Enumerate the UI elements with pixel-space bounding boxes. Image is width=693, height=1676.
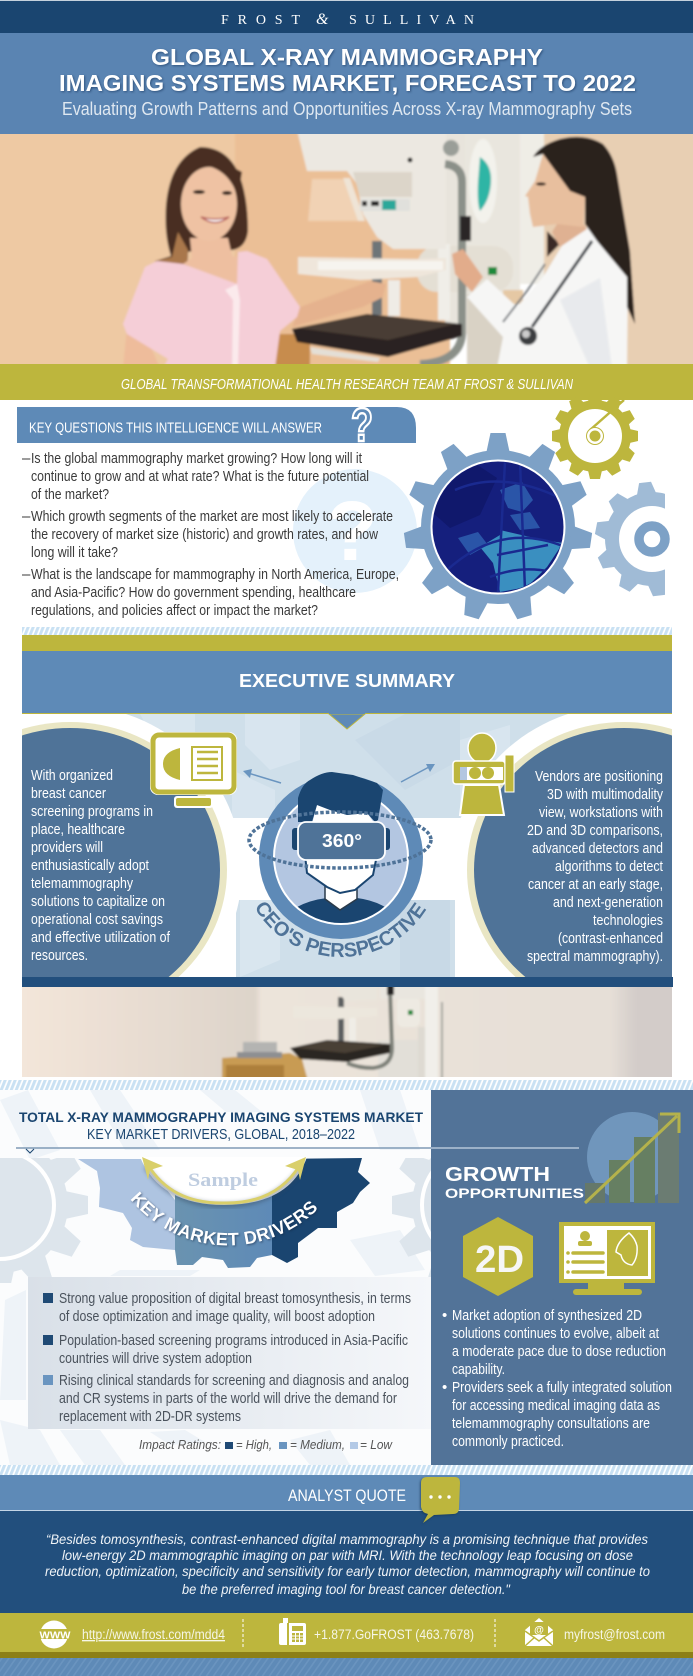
heading: OPPORTUNITIES bbox=[445, 1185, 584, 1201]
left summary text: screening programs in bbox=[31, 803, 153, 820]
footer stripe band bbox=[0, 1658, 693, 1676]
hex background bbox=[110, 714, 590, 977]
legend: impact ratings: Impact Ratings: bbox=[139, 1437, 221, 1452]
right summary text: spectral mammography). bbox=[527, 948, 663, 965]
key questions list: continue to grow and at what rate? What is the future potential bbox=[31, 468, 369, 485]
text: • bbox=[442, 1379, 447, 1396]
heading: key market drivers: KEY MARKET DRIVERS, GLOBAL, 2018–2022 bbox=[87, 1126, 355, 1143]
left summary text: solutions to capitalize on bbox=[31, 893, 165, 910]
hair bbox=[298, 772, 383, 822]
panel: executive summary bbox=[22, 714, 672, 977]
heading bbox=[445, 1164, 584, 1201]
key questions list: the recovery of market size (historic) and growth rates, and how bbox=[31, 526, 378, 543]
icon: www bbox=[38, 1620, 72, 1648]
gear: key market drivers bbox=[78, 1157, 370, 1268]
left summary text: operational cost savings bbox=[31, 911, 163, 928]
photo: mammography room bbox=[18, 983, 676, 1081]
arrow: to left icon bbox=[243, 769, 281, 783]
subtitle: Evaluating Growth Patterns and Opportunities Across X-ray Mammography Sets bbox=[62, 99, 632, 119]
text: Market adoption of synthesized 2D bbox=[452, 1307, 642, 1324]
globe land and grid bbox=[432, 460, 565, 592]
ear pieces bbox=[292, 828, 300, 850]
panel: driver list: of dose optimization and image quality, will boost adoption bbox=[59, 1308, 375, 1325]
quote text: “Besides tomosynthesis, contrast-enhanced digital mammography is a promising technique that provides bbox=[46, 1531, 648, 1547]
legend: impact ratings: = Medium, bbox=[290, 1437, 345, 1452]
stripes bbox=[0, 1465, 693, 1475]
brand name: FROST bbox=[221, 13, 300, 28]
top brand bar bbox=[0, 0, 693, 33]
key questions list: – bbox=[22, 566, 31, 583]
right summary text: cancer at an early stage, bbox=[528, 876, 663, 893]
bullet: high bbox=[43, 1293, 53, 1303]
panel: driver list: Rising clinical standards for screening and diagnosis and analog bbox=[59, 1372, 409, 1389]
title banner bbox=[0, 33, 693, 134]
right summary text: Vendors are positioning bbox=[535, 768, 663, 785]
heading: key market drivers: TOTAL X-RAY MAMMOGRAPHY IMAGING SYSTEMS MARKET bbox=[19, 1109, 423, 1125]
key questions header: KEY QUESTIONS THIS INTELLIGENCE WILL ANSWER bbox=[29, 420, 322, 436]
shoulders bbox=[298, 898, 384, 923]
right summary text: view, workstations with bbox=[539, 804, 663, 821]
left summary text: place, healthcare bbox=[31, 821, 125, 838]
text: telemammography consultations are bbox=[452, 1415, 650, 1432]
panel: driver list: and CR systems in parts of the world will drive the demand for bbox=[59, 1390, 397, 1407]
left summary text: providers will bbox=[31, 839, 103, 856]
icon: large pale question mark circle: ? bbox=[326, 484, 378, 578]
heading: key market drivers bbox=[19, 1109, 423, 1143]
footer contact bar bbox=[0, 1613, 693, 1658]
hero photo: patient and technician at mammography machine bbox=[0, 130, 693, 370]
olive credit band: GLOBAL TRANSFORMATIONAL HEALTH RESEARCH TEAM AT FROST & SULLIVAN bbox=[121, 377, 573, 393]
icon: 2D hexagon: 2D bbox=[475, 1239, 524, 1281]
background pattern bbox=[0, 1090, 425, 1465]
right summary text: (contrast-enhanced bbox=[558, 930, 663, 947]
right summary text: 2D and 3D comparisons, bbox=[527, 822, 663, 839]
panel: driver list: replacement with 2D-DR systems bbox=[59, 1408, 241, 1425]
icon: mail bbox=[525, 1618, 553, 1646]
panel: growth opportunities bbox=[431, 1090, 693, 1465]
legend: impact ratings: = Low bbox=[360, 1437, 393, 1452]
neck bbox=[325, 885, 357, 910]
icon: mail: @ bbox=[534, 1625, 544, 1636]
key questions list: Which growth segments of the market are most likely to accelerate bbox=[31, 508, 393, 525]
left summary text: resources. bbox=[31, 947, 88, 964]
icon: olive gear bbox=[552, 393, 638, 479]
executive summary banner bbox=[22, 651, 672, 714]
quote text: reduction, optimization, specificity and sensitivity for early tumor detection, mammography will continue to bbox=[45, 1563, 650, 1579]
right summary text: advanced detectors and bbox=[532, 840, 663, 857]
goggles bbox=[298, 822, 385, 860]
technician bbox=[467, 227, 628, 368]
right summary text: 3D with multimodality bbox=[547, 786, 663, 803]
left summary text: breast cancer bbox=[31, 785, 106, 802]
icon: telephone bbox=[279, 1618, 306, 1645]
icon: growth chart bbox=[585, 1112, 679, 1203]
icon: www: WWW bbox=[40, 1630, 71, 1642]
text bbox=[442, 1307, 672, 1450]
panel: analyst quote bbox=[0, 1475, 693, 1613]
key questions list: – bbox=[22, 508, 31, 525]
key questions list: Is the global mammography market growing? How long will it bbox=[31, 450, 363, 467]
panel: driver list bbox=[28, 1277, 431, 1429]
divider bar bbox=[22, 977, 673, 987]
key questions list: regulations, and policies affect or impact the market? bbox=[31, 602, 318, 619]
curved label bbox=[130, 1199, 319, 1245]
icon: CEO with VR headset: 360° bbox=[322, 831, 362, 851]
panel: driver list: Population-based screening programs introduced in Asia-Pacific bbox=[59, 1332, 408, 1349]
curved label: CEO's perspective: CEO'S PERSPECTIVE bbox=[256, 902, 426, 958]
pointer triangle bbox=[329, 711, 365, 729]
icon: speech bubble bbox=[421, 1477, 460, 1523]
icon: workstation monitor bbox=[559, 1222, 655, 1295]
top brand bar: SULLIVAN bbox=[349, 13, 474, 28]
key questions list bbox=[22, 450, 399, 619]
panel: key market drivers bbox=[0, 1090, 431, 1465]
title bbox=[59, 44, 636, 96]
left summary text: and effective utilization of bbox=[31, 929, 171, 946]
key questions list: What is the landscape for mammography in North America, Europe, bbox=[31, 566, 399, 583]
left summary text bbox=[31, 767, 171, 964]
orbit dots bbox=[249, 812, 431, 868]
key questions list: – bbox=[22, 450, 31, 467]
website link: http://www.frost.com/mdd4 bbox=[82, 1627, 225, 1642]
bullet: medium bbox=[43, 1375, 53, 1385]
text: • bbox=[442, 1307, 447, 1324]
left summary text: enthusiastically adopt bbox=[31, 857, 150, 874]
quote text: low-energy 2D mammographic imaging on par with MRI. With the technology leap focusing on dose bbox=[62, 1547, 633, 1563]
left summary text: telemammography bbox=[31, 875, 133, 892]
heading rule bbox=[16, 1148, 579, 1153]
right summary text bbox=[527, 768, 664, 965]
top brand bar: & bbox=[316, 11, 329, 28]
quote text bbox=[45, 1531, 650, 1597]
left blue arc panel bbox=[22, 714, 239, 977]
phone number: +1.877.GoFROST (463.7678) bbox=[314, 1627, 474, 1642]
arrow: curved double head bbox=[142, 1157, 306, 1203]
key questions list: and Asia-Pacific? How do government spending, healthcare bbox=[31, 584, 356, 601]
right summary text: algorithms to detect bbox=[555, 858, 664, 875]
icon: light blue gear bbox=[594, 482, 670, 596]
icon: large pale question mark circle bbox=[293, 469, 417, 593]
olive credit band bbox=[0, 364, 693, 400]
panel: driver list: countries will drive system adoption bbox=[59, 1350, 252, 1367]
text: capability. bbox=[452, 1361, 505, 1378]
heading: ANALYST QUOTE bbox=[288, 1486, 406, 1505]
text: commonly practiced. bbox=[452, 1433, 564, 1450]
quote text: be the preferred imaging tool for breast cancer detection." bbox=[182, 1581, 511, 1597]
stripes and olive band bbox=[22, 627, 672, 651]
legend: impact ratings bbox=[139, 1437, 393, 1452]
title: IMAGING SYSTEMS MARKET, FORECAST TO 2022 bbox=[59, 70, 636, 96]
title: GLOBAL X-RAY MAMMOGRAPHY bbox=[151, 44, 543, 70]
key questions list: of the market? bbox=[31, 486, 109, 503]
stripes bbox=[0, 1080, 693, 1090]
background gears bbox=[0, 1158, 431, 1283]
legend: impact ratings: = High, bbox=[236, 1437, 272, 1452]
machine bbox=[445, 130, 467, 334]
right blue arc panel bbox=[460, 714, 672, 977]
patient bbox=[124, 336, 158, 364]
bullet: high bbox=[43, 1335, 53, 1345]
face bbox=[305, 855, 377, 893]
icon: question mark: ? bbox=[351, 398, 373, 451]
icon: monitor with mammogram bbox=[150, 732, 237, 808]
key questions list: long will it take? bbox=[31, 544, 118, 561]
right summary text: technologies bbox=[593, 912, 663, 929]
icon: 2D hexagon bbox=[463, 1217, 533, 1296]
icon: large gear with globe bbox=[403, 433, 593, 621]
watermark: Sample bbox=[188, 1170, 258, 1191]
left summary text: With organized bbox=[31, 767, 113, 784]
executive summary banner: EXECUTIVE SUMMARY bbox=[239, 670, 456, 691]
icon: CEO with VR headset bbox=[249, 772, 431, 939]
white bowl bbox=[140, 1157, 307, 1205]
arrow: to right icon bbox=[401, 764, 435, 782]
gear: key market drivers: KEY MARKET DRIVERS bbox=[130, 1192, 318, 1248]
heading: GROWTH bbox=[445, 1164, 550, 1186]
email: myfrost@frost.com bbox=[564, 1627, 665, 1642]
icon: person with imaging device bbox=[453, 733, 514, 815]
right summary text: and next-generation bbox=[553, 894, 663, 911]
panel: driver list: Strong value proposition of digital breast tomosynthesis, in terms bbox=[59, 1290, 411, 1307]
key questions header bbox=[17, 398, 416, 451]
